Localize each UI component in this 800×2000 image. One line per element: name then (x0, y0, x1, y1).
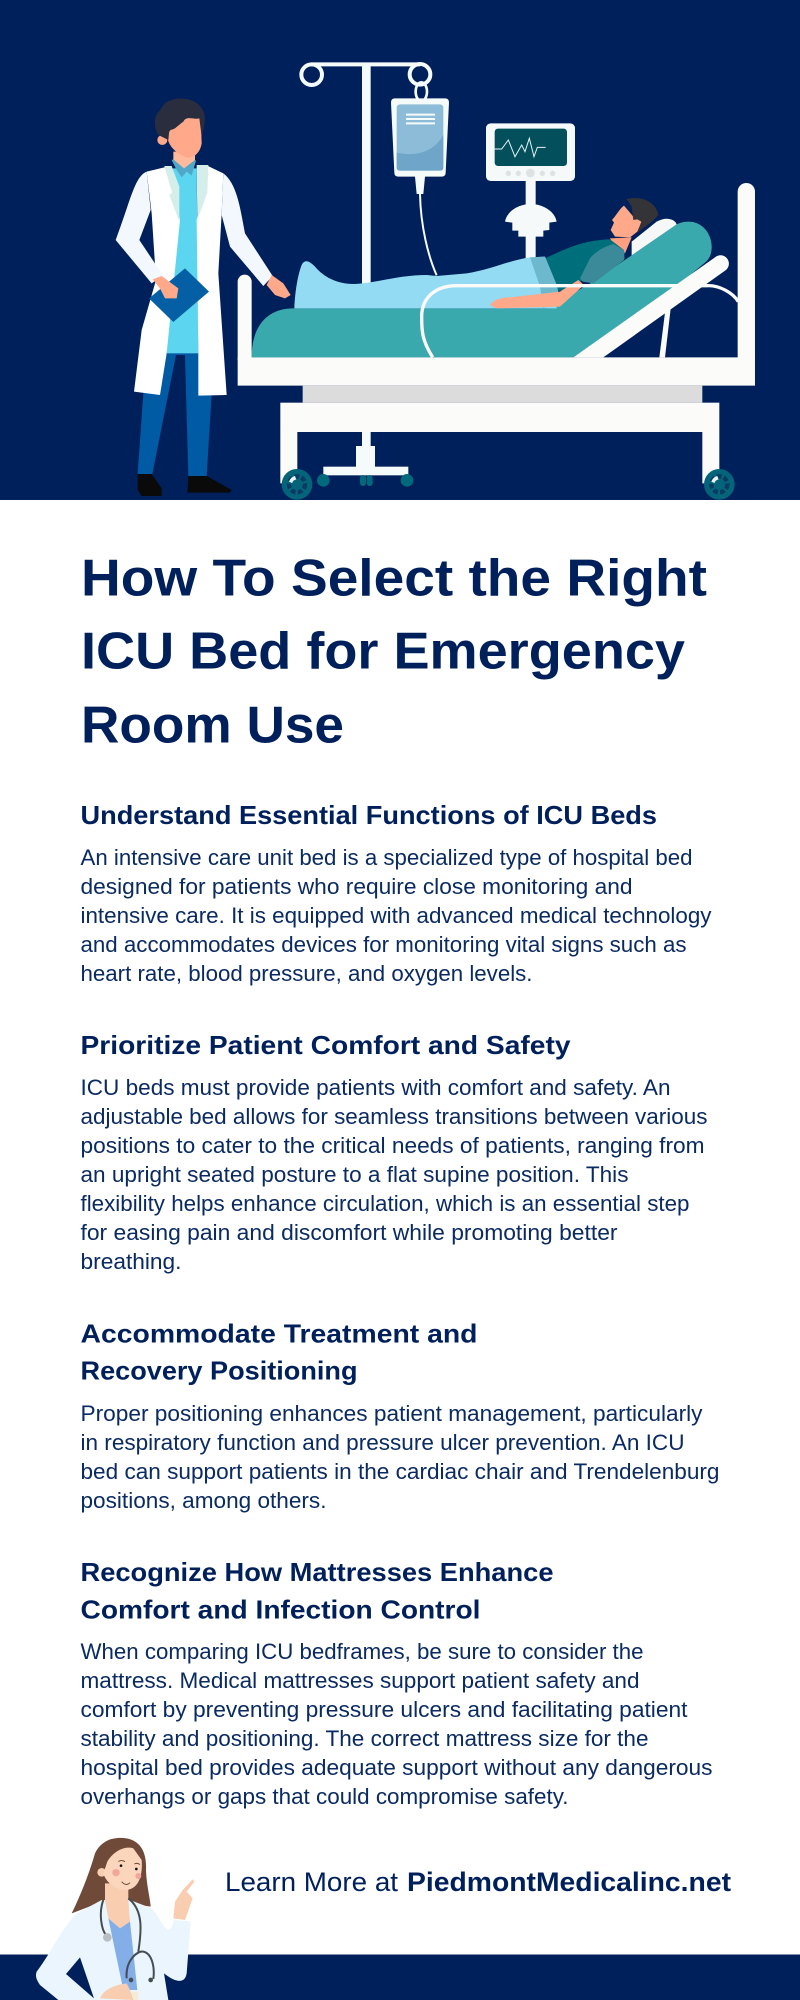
icon: mattress (252, 222, 712, 357)
title: How To Select the Right (81, 550, 707, 608)
icon: bed wheels (282, 469, 735, 500)
body text (80, 1075, 708, 1274)
title: ICU Bed for Emergency (81, 622, 685, 680)
section: essential functions (80, 800, 712, 986)
woman doctor figure (36, 1838, 194, 2000)
heading: Accommodate Treatment and (80, 1318, 478, 1348)
section: comfort and safety (80, 1030, 708, 1274)
body text: heart rate, blood pressure, and oxygen levels. (80, 961, 532, 986)
body text: designed for patients who require close monitoring and (80, 874, 632, 899)
body text: flexibility helps enhance circulation, which is an essential step (80, 1191, 690, 1216)
body text: hospital bed provides adequate support without any dangerous (80, 1755, 712, 1780)
icon: IV pole base (317, 432, 413, 487)
body text: When comparing ICU bedframes, be sure to consider the (80, 1639, 644, 1664)
body text: an upright seated posture to a flat supine position. This (80, 1162, 628, 1187)
body text (80, 1401, 720, 1513)
heading: Prioritize Patient Comfort and Safety (80, 1030, 571, 1060)
body text: positions to cater to the critical needs of patients, ranging from (80, 1133, 704, 1158)
call to action: Learn More at (225, 1867, 399, 1897)
body text: positions, among others. (80, 1488, 326, 1513)
call to action: PiedmontMedicalinc.net (407, 1867, 731, 1897)
body text (80, 845, 712, 986)
icon: bed frame (238, 183, 755, 483)
body text: mattress. Medical mattresses support patient safety and (80, 1668, 640, 1693)
body text: bed can support patients in the cardiac chair and Trendelenburg (80, 1459, 720, 1484)
doctor figure (116, 99, 291, 496)
hero illustration panel (0, 0, 800, 500)
body text: adjustable bed allows for seamless transitions between various (80, 1104, 708, 1129)
body text: intensive care. It is equipped with advanced medical technology (80, 903, 712, 928)
heading (80, 1318, 478, 1385)
body text: and accommodates devices for monitoring vital signs such as (80, 932, 686, 957)
body text: ICU beds must provide patients with comfort and safety. An (80, 1075, 670, 1100)
icon: blanket (294, 257, 584, 308)
call to action (225, 1867, 731, 1897)
heading: Recognize How Mattresses Enhance (80, 1557, 554, 1587)
footer bar (0, 1954, 800, 2000)
heading: Recovery Positioning (80, 1355, 358, 1385)
body text: An intensive care unit bed is a specialized type of hospital bed (80, 845, 692, 870)
body text: Proper positioning enhances patient management, particularly (80, 1401, 702, 1426)
icon: patient (545, 198, 677, 291)
section: treatment positioning (80, 1318, 720, 1513)
body text: for easing pain and discomfort while promoting better (80, 1220, 618, 1245)
icon: patient monitor (486, 123, 575, 260)
icon: IV bag (391, 82, 449, 275)
heading (80, 1557, 554, 1624)
heading: Comfort and Infection Control (80, 1594, 480, 1624)
heading: Understand Essential Functions of ICU Beds (80, 800, 657, 830)
title (81, 550, 707, 754)
body text: stability and positioning. The correct mattress size for the (80, 1726, 648, 1751)
title: Room Use (81, 696, 344, 754)
body text: breathing. (80, 1249, 182, 1274)
icon: IV pole (301, 64, 430, 285)
body text: overhangs or gaps that could compromise safety. (80, 1784, 568, 1809)
body text: in respiratory function and pressure ulcer prevention. An ICU (80, 1430, 684, 1455)
section: mattresses (80, 1557, 712, 1809)
body text (80, 1639, 712, 1809)
body text: comfort by preventing pressure ulcers and facilitating patient (80, 1697, 688, 1722)
